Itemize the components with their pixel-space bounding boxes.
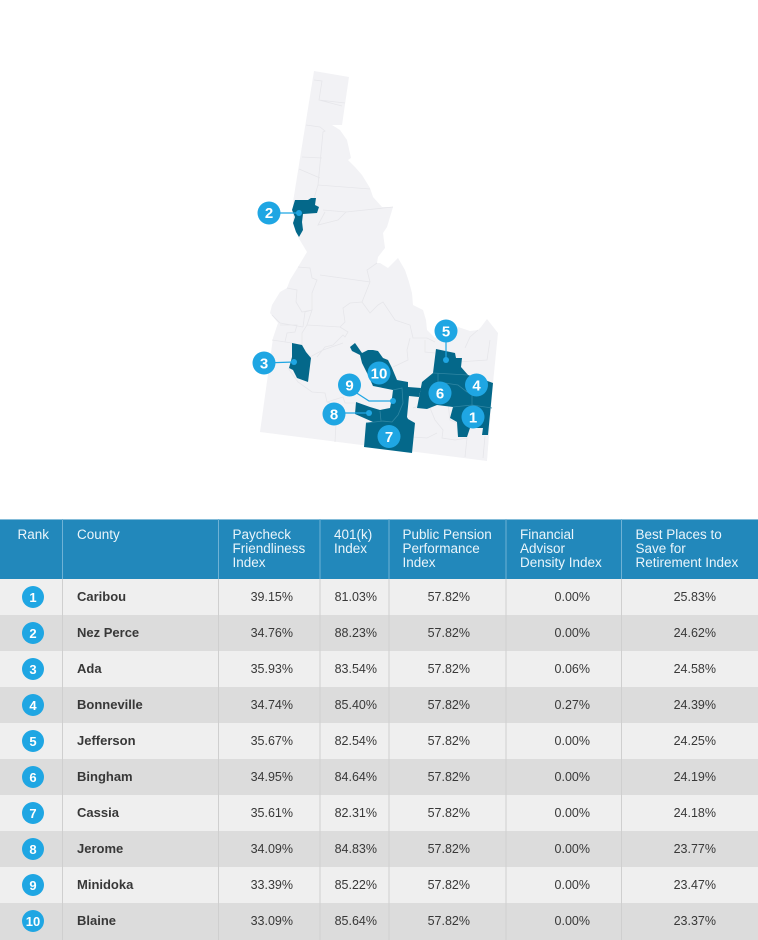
ranking table <box>0 519 758 940</box>
row 5: 0.00% <box>555 734 590 748</box>
row 10: 10 <box>26 914 40 929</box>
row 9 <box>0 867 758 903</box>
row 7: 57.82% <box>428 806 470 820</box>
marker 4 <box>465 374 488 396</box>
table header: Performance <box>402 541 480 556</box>
row 7: Cassia <box>77 805 120 820</box>
table header: County <box>77 527 120 542</box>
county borders <box>272 80 490 458</box>
row 8: 84.83% <box>335 842 377 856</box>
row 1: Caribou <box>77 589 126 604</box>
table header: 401(k) <box>334 527 372 542</box>
row 8: 34.09% <box>251 842 293 856</box>
row 6: 6 <box>29 770 37 785</box>
row 5: 5 <box>29 734 37 749</box>
row 9: 85.22% <box>335 878 377 892</box>
row 4: 4 <box>29 698 37 713</box>
row 10: 57.82% <box>428 914 470 928</box>
row 1: 81.03% <box>335 590 377 604</box>
row 5: 82.54% <box>335 734 377 748</box>
row 4: 85.40% <box>335 698 377 712</box>
row 6: Bingham <box>77 769 133 784</box>
row 3: Ada <box>77 661 102 676</box>
highlighted county: Ada <box>289 343 311 382</box>
row 6: 0.00% <box>555 770 590 784</box>
row 9: 0.00% <box>555 878 590 892</box>
row 8: 57.82% <box>428 842 470 856</box>
table header: Retirement Index <box>636 555 739 570</box>
table header: Index <box>334 541 367 556</box>
row 3: 3 <box>29 662 37 677</box>
row 1: 39.15% <box>251 590 293 604</box>
row 1: 57.82% <box>428 590 470 604</box>
table header: Index <box>402 555 436 570</box>
row 4: 34.74% <box>251 698 293 712</box>
table header: Paycheck <box>232 527 291 542</box>
row 10: 85.64% <box>335 914 377 928</box>
row 9: 23.47% <box>674 878 716 892</box>
marker 9 <box>338 374 396 404</box>
marker 2: 2 <box>265 205 273 222</box>
row 8: Jerome <box>77 841 123 856</box>
marker 8: 8 <box>330 406 338 424</box>
marker 1 <box>462 406 484 428</box>
row 2: 34.76% <box>251 626 293 640</box>
row 3 <box>0 651 758 687</box>
highlighted county: Nez Perce <box>292 198 319 237</box>
row 3: 35.93% <box>251 662 293 676</box>
marker 9: 9 <box>345 378 354 394</box>
row 2: Nez Perce <box>77 625 139 640</box>
marker 1: 1 <box>469 410 477 426</box>
marker 6: 6 <box>436 386 444 402</box>
marker 2 <box>258 202 302 224</box>
row 7: 0.00% <box>555 806 590 820</box>
marker 3: 3 <box>260 356 268 372</box>
row 2: 57.82% <box>428 626 470 640</box>
row 3: 24.58% <box>674 662 716 676</box>
map of Idaho <box>252 71 498 461</box>
row 10: 33.09% <box>251 914 293 928</box>
row 8 <box>0 831 758 867</box>
row 9: 33.39% <box>251 878 293 892</box>
row 6: 84.64% <box>335 770 377 784</box>
table header: Index <box>232 555 266 570</box>
row 9: 9 <box>29 878 37 893</box>
row 5: Jefferson <box>77 733 136 748</box>
highlighted counties: Blaine, Minidoka, Jerome and Cassia <box>350 343 421 453</box>
row 10 <box>0 903 758 940</box>
table header: Best Places to <box>636 527 722 542</box>
row 7: 24.18% <box>674 806 716 820</box>
table header: Rank <box>18 527 49 542</box>
table header <box>0 519 758 579</box>
row 7: 7 <box>29 806 37 821</box>
row 3: 0.06% <box>555 662 590 676</box>
row 5 <box>0 723 758 759</box>
row 10: Blaine <box>77 913 116 928</box>
row 4 <box>0 687 758 723</box>
row 4: 57.82% <box>428 698 470 712</box>
row 6: 34.95% <box>251 770 293 784</box>
highlighted counties: Jefferson, Bonneville, Bingham and Caribou <box>417 349 493 437</box>
marker 5 <box>434 320 458 363</box>
row 6: 24.19% <box>674 770 716 784</box>
row 9: Minidoka <box>77 877 134 892</box>
row 4: Bonneville <box>77 697 143 712</box>
table header: Advisor <box>520 541 566 556</box>
row 10: 23.37% <box>674 914 716 928</box>
row 6: 57.82% <box>428 770 470 784</box>
marker 10 <box>368 362 390 384</box>
row 2 <box>0 615 758 651</box>
marker 8 <box>322 402 372 426</box>
table header: Friendliness <box>232 541 306 556</box>
marker 10: 10 <box>371 366 387 382</box>
table header: Financial <box>520 527 574 542</box>
table header: Save for <box>636 541 686 556</box>
row 8: 23.77% <box>674 842 716 856</box>
row 10: 0.00% <box>555 914 590 928</box>
row 1 <box>0 579 758 615</box>
state base shape <box>260 71 498 461</box>
row 8: 0.00% <box>555 842 590 856</box>
table header: Density Index <box>520 555 602 570</box>
row 7 <box>0 795 758 831</box>
row 3: 57.82% <box>428 662 470 676</box>
marker 4: 4 <box>472 378 481 394</box>
marker 6 <box>428 382 452 404</box>
marker 5: 5 <box>442 324 450 340</box>
row 4: 24.39% <box>674 698 716 712</box>
row 5: 24.25% <box>674 734 716 748</box>
row 5: 35.67% <box>251 734 293 748</box>
table header: Public Pension <box>402 527 492 542</box>
marker 7 <box>378 425 400 448</box>
row 6 <box>0 759 758 795</box>
row 1: 25.83% <box>674 590 716 604</box>
row 5: 57.82% <box>428 734 470 748</box>
marker 7: 7 <box>385 429 393 446</box>
row 3: 83.54% <box>335 662 377 676</box>
row 1: 0.00% <box>555 590 590 604</box>
row 7: 82.31% <box>335 806 377 820</box>
row 7: 35.61% <box>251 806 293 820</box>
row 9: 57.82% <box>428 878 470 892</box>
row 8: 8 <box>29 842 37 857</box>
row 4: 0.27% <box>555 698 590 712</box>
row 2: 88.23% <box>335 626 377 640</box>
row 2: 0.00% <box>555 626 590 640</box>
row 1: 1 <box>29 590 37 605</box>
marker 3 <box>252 352 297 374</box>
row 2: 2 <box>29 626 37 641</box>
row 2: 24.62% <box>674 626 716 640</box>
